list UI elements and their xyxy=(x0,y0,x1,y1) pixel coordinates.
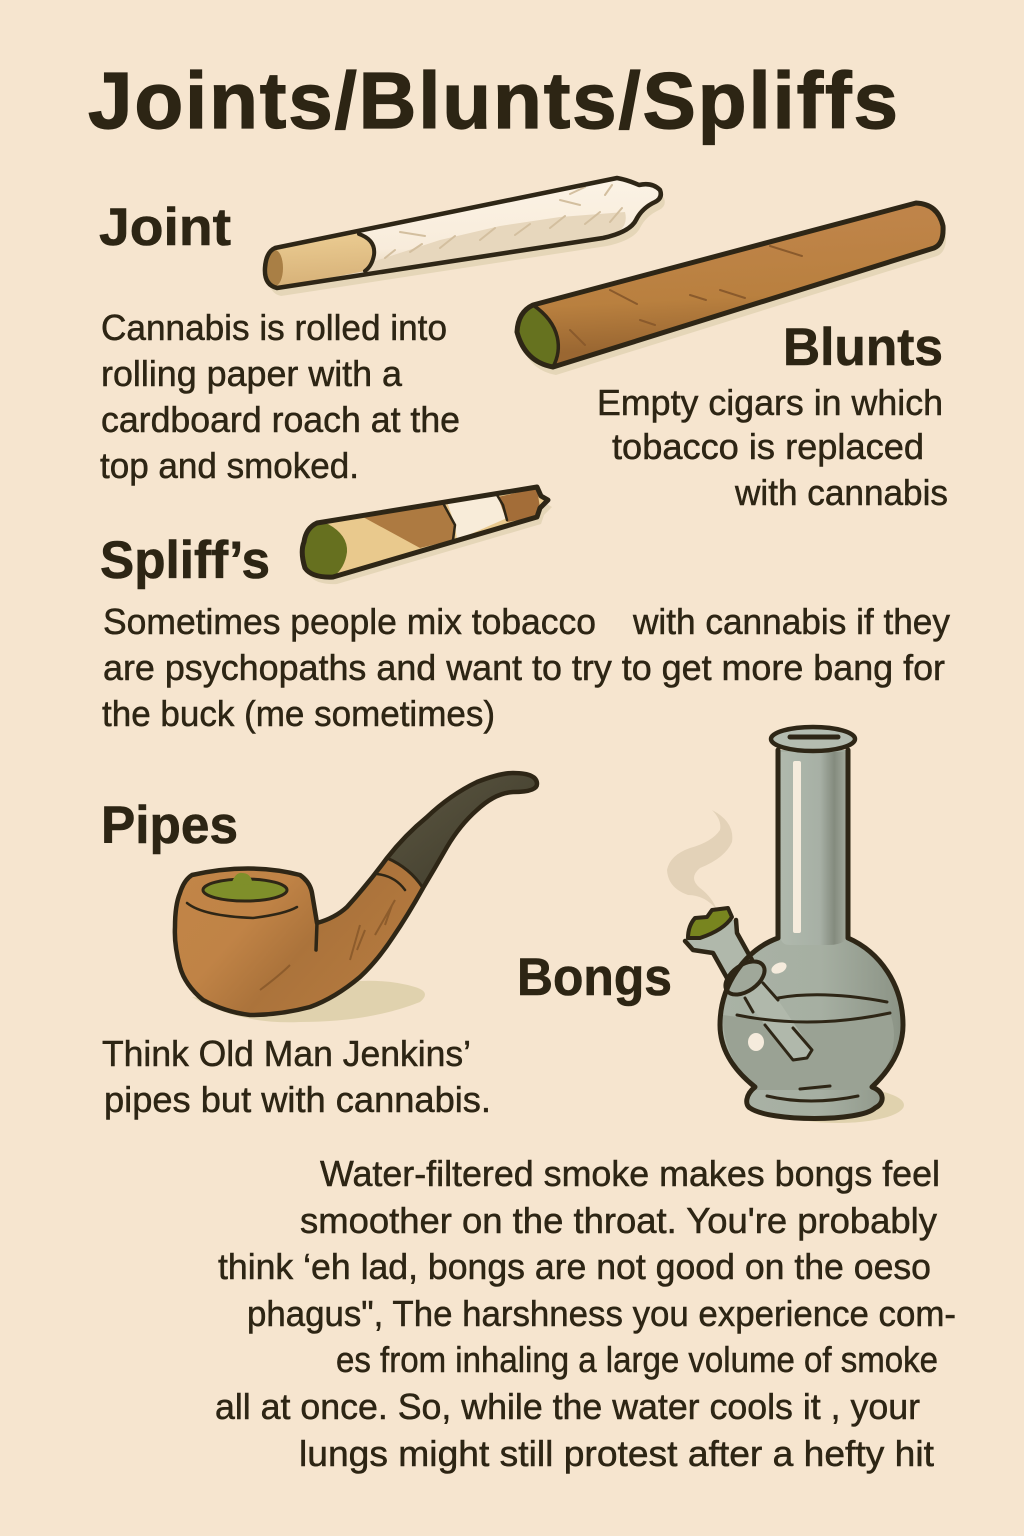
heading: spliff's: Spliff’s xyxy=(100,531,270,590)
panel: pipes xyxy=(101,773,537,1120)
heading: bongs: Bongs xyxy=(517,948,672,1007)
icon: pipe xyxy=(175,773,537,1022)
text: blunts description: tobacco is replaced xyxy=(612,426,924,467)
text: blunts description: with cannabis xyxy=(734,472,948,513)
icon: joint xyxy=(265,178,665,296)
heading: pipes: Pipes xyxy=(101,796,238,855)
text: joint description xyxy=(100,307,460,486)
text: joint description: cardboard roach at the xyxy=(101,399,460,440)
text: joint description: rolling paper with a xyxy=(101,353,403,394)
icon: blunt xyxy=(517,203,946,375)
text: blunts description: Empty cigars in which xyxy=(597,382,943,423)
heading: blunts: Blunts xyxy=(783,318,943,377)
text: spliff description: the buck (me sometimes) xyxy=(102,693,495,734)
panel: spliffs xyxy=(100,487,950,734)
panel: blunts xyxy=(517,203,948,513)
text: spliff description: with cannabis if they xyxy=(632,601,950,642)
heading: joint: Joint xyxy=(99,198,231,257)
text: spliff description: Sometimes people mix tobacco xyxy=(103,601,596,642)
text: bongs description xyxy=(215,1153,956,1474)
panel: joint xyxy=(99,178,665,486)
text: spliff description xyxy=(102,601,950,734)
title: Joints/Blunts/Spliffs xyxy=(88,56,898,145)
text: bongs description: Water-filtered smoke makes bongs feel xyxy=(320,1153,940,1194)
panel: bongs xyxy=(215,727,956,1474)
text: bongs description: all at once. So, while the water cools it , your xyxy=(215,1386,920,1427)
text: joint description: top and smoked. xyxy=(100,445,359,486)
text: bongs description: smoother on the throat. You're probably xyxy=(300,1200,937,1241)
icon: bong xyxy=(667,727,904,1123)
text: joint description: Cannabis is rolled into xyxy=(101,307,447,348)
downstem xyxy=(685,908,812,1060)
text: pipes description xyxy=(102,1033,491,1120)
icon: spliff xyxy=(302,487,552,584)
smoke xyxy=(667,810,732,910)
text: pipes description: Think Old Man Jenkins’ xyxy=(102,1033,471,1074)
text: bongs description: es from inhaling a large volume of smoke xyxy=(336,1339,938,1380)
text: pipes description: pipes but with cannabis. xyxy=(104,1079,491,1120)
text: bongs description: lungs might still protest after a hefty hit xyxy=(299,1433,934,1474)
cannabis in bowl xyxy=(203,873,287,901)
text: bongs description: think ‘eh lad, bongs are not good on the oeso xyxy=(218,1246,931,1287)
text: blunts description xyxy=(597,382,948,513)
text: spliff description: are psychopaths and want to try to get more bang for xyxy=(103,647,945,688)
text: bongs description: phagus", The harshness you experience com- xyxy=(247,1293,956,1334)
